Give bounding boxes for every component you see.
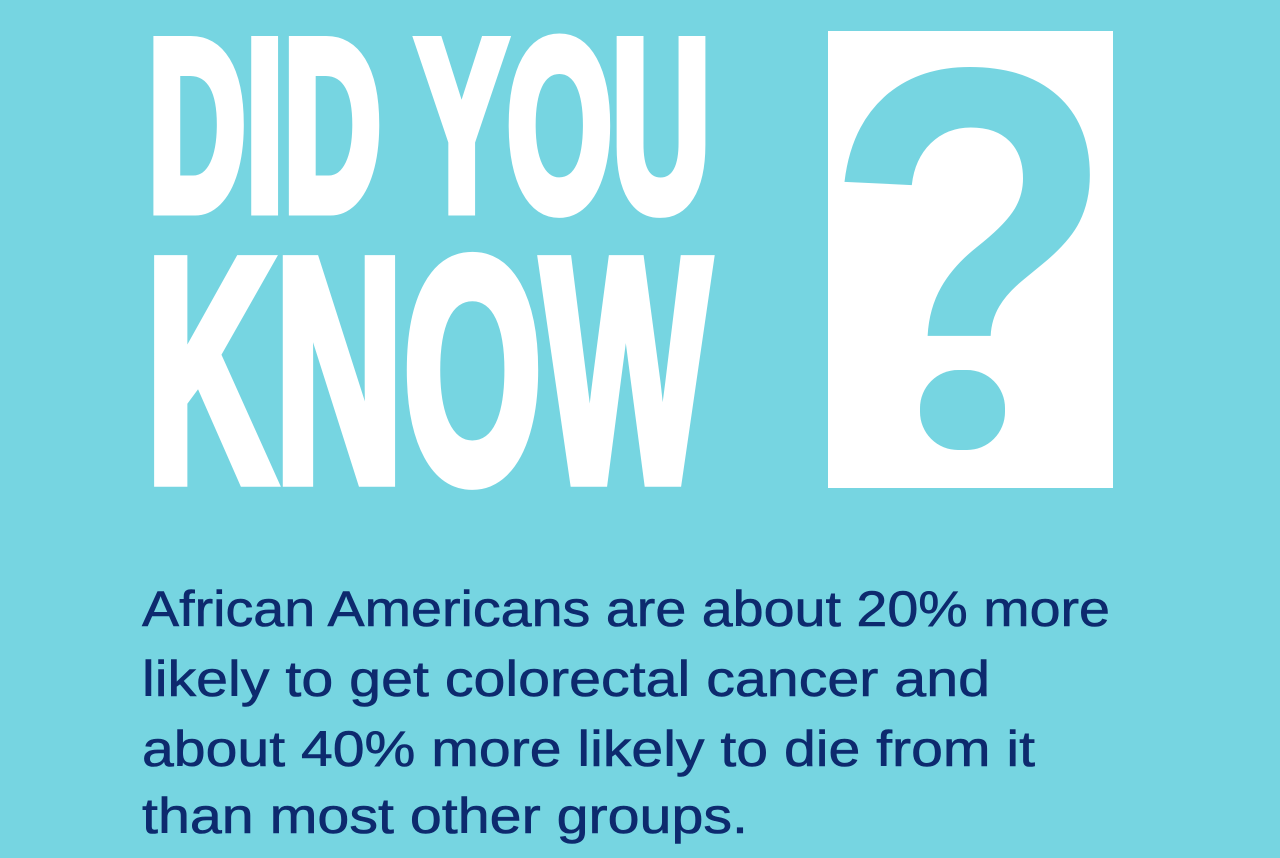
title: DID YOU KNOW [146, 0, 710, 547]
text block: statistic: about 40% more likely to die from it [142, 721, 1035, 777]
title: DID YOU KNOW: KNOW [146, 193, 710, 547]
text block: statistic: than most other groups. [142, 788, 748, 844]
text block: statistic: African Americans are about 20% more [142, 581, 1110, 637]
text block: statistic: likely to get colorectal cancer and [142, 651, 990, 707]
text block: statistic [142, 581, 1110, 844]
